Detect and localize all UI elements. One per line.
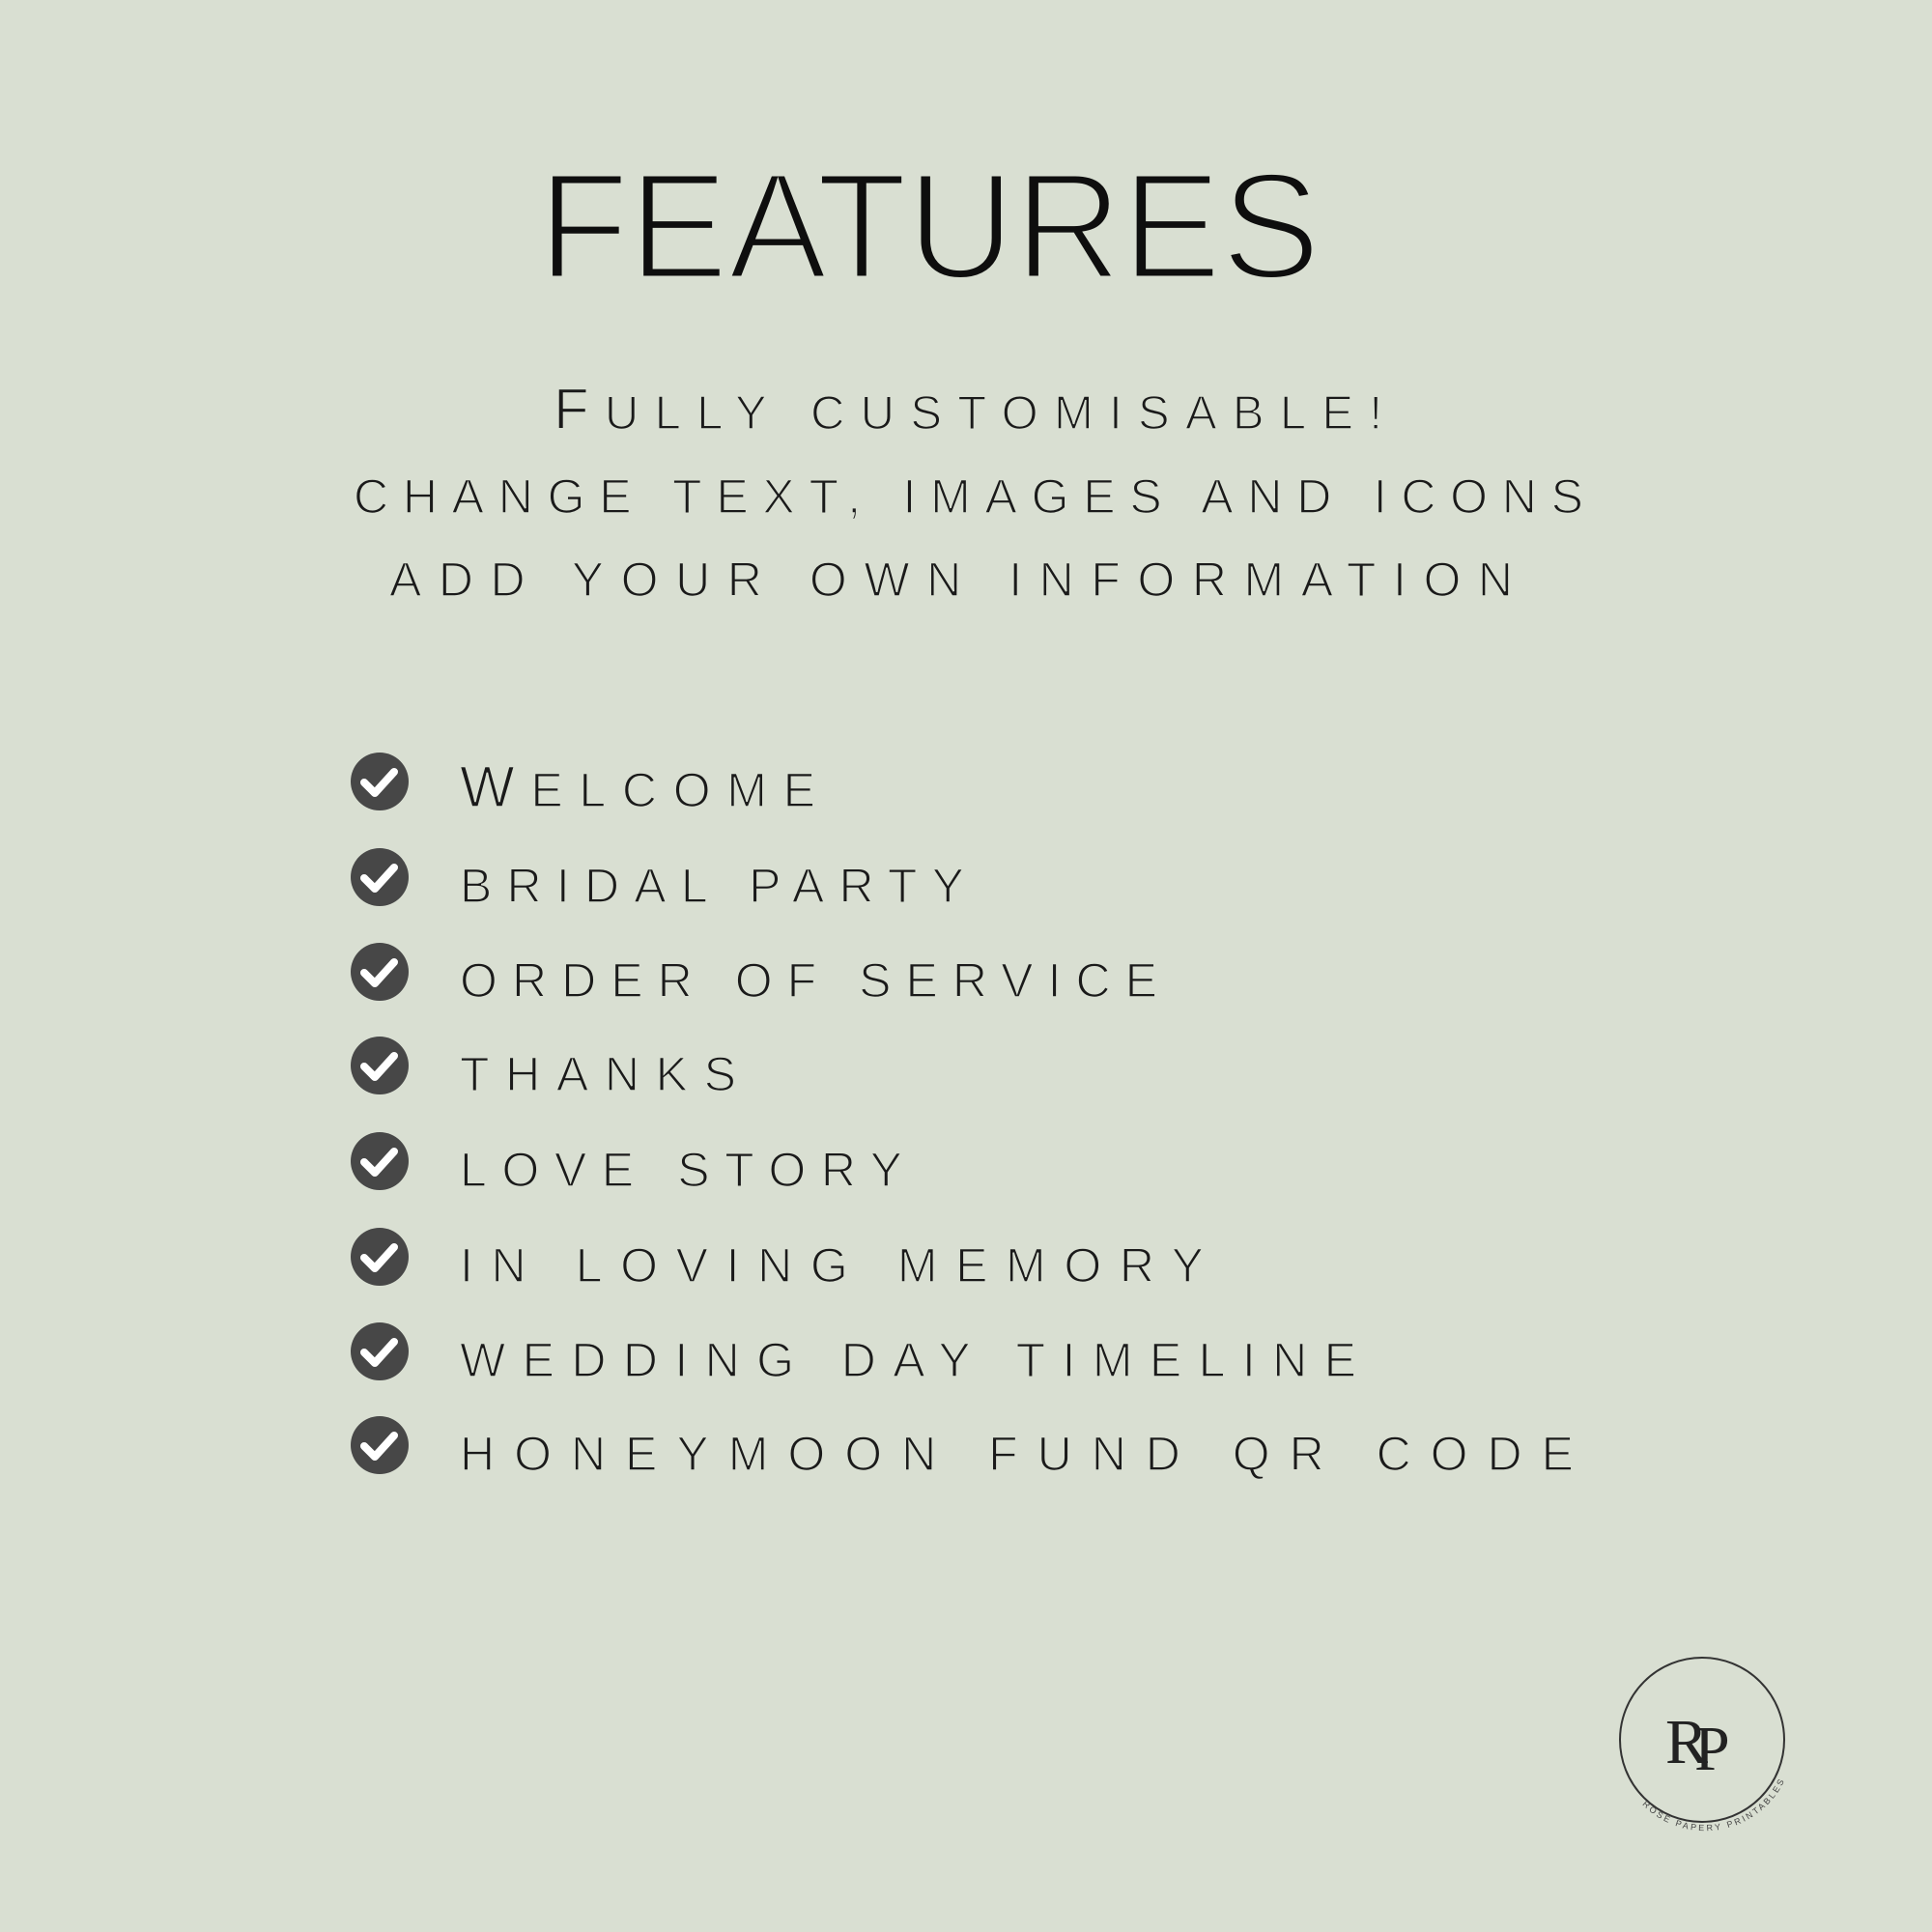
subtitle: F ULLY CUSTOMISABLE!: [554, 377, 1382, 441]
item: bridal party: BRIDAL PARTY: [460, 859, 964, 913]
subtitle: CHANGE TEXT, IMAGES AND ICONS: [354, 469, 1583, 524]
title: FEATURES: [538, 142, 1321, 311]
subtitle: [354, 377, 1583, 607]
feature list: [351, 753, 1574, 1481]
item: wedding day timeline: WEDDING DAY TIMELINE: [460, 1333, 1356, 1387]
logo: [1619, 1657, 1785, 1832]
logo: R: [1665, 1707, 1708, 1777]
item: order of service: ORDER OF SERVICE: [460, 953, 1157, 1008]
item: thanks: THANKS: [460, 1047, 736, 1101]
item: honeymoon fund qr code: HONEYMOON FUND QR CODE: [460, 1427, 1574, 1481]
logo: ROSE PAPERY PRINTABLES: [1642, 1779, 1783, 1832]
item: in loving memory: IN LOVING MEMORY: [460, 1238, 1204, 1293]
item: love story: LOVE STORY: [460, 1143, 902, 1197]
item: love story: [351, 1132, 902, 1197]
item: welcome: W ELCOME: [460, 754, 815, 819]
item: thanks: [351, 1037, 736, 1101]
subtitle: ADD YOUR OWN INFORMATION: [389, 553, 1513, 607]
item: bridal party: [351, 848, 964, 913]
logo: P: [1694, 1714, 1730, 1784]
